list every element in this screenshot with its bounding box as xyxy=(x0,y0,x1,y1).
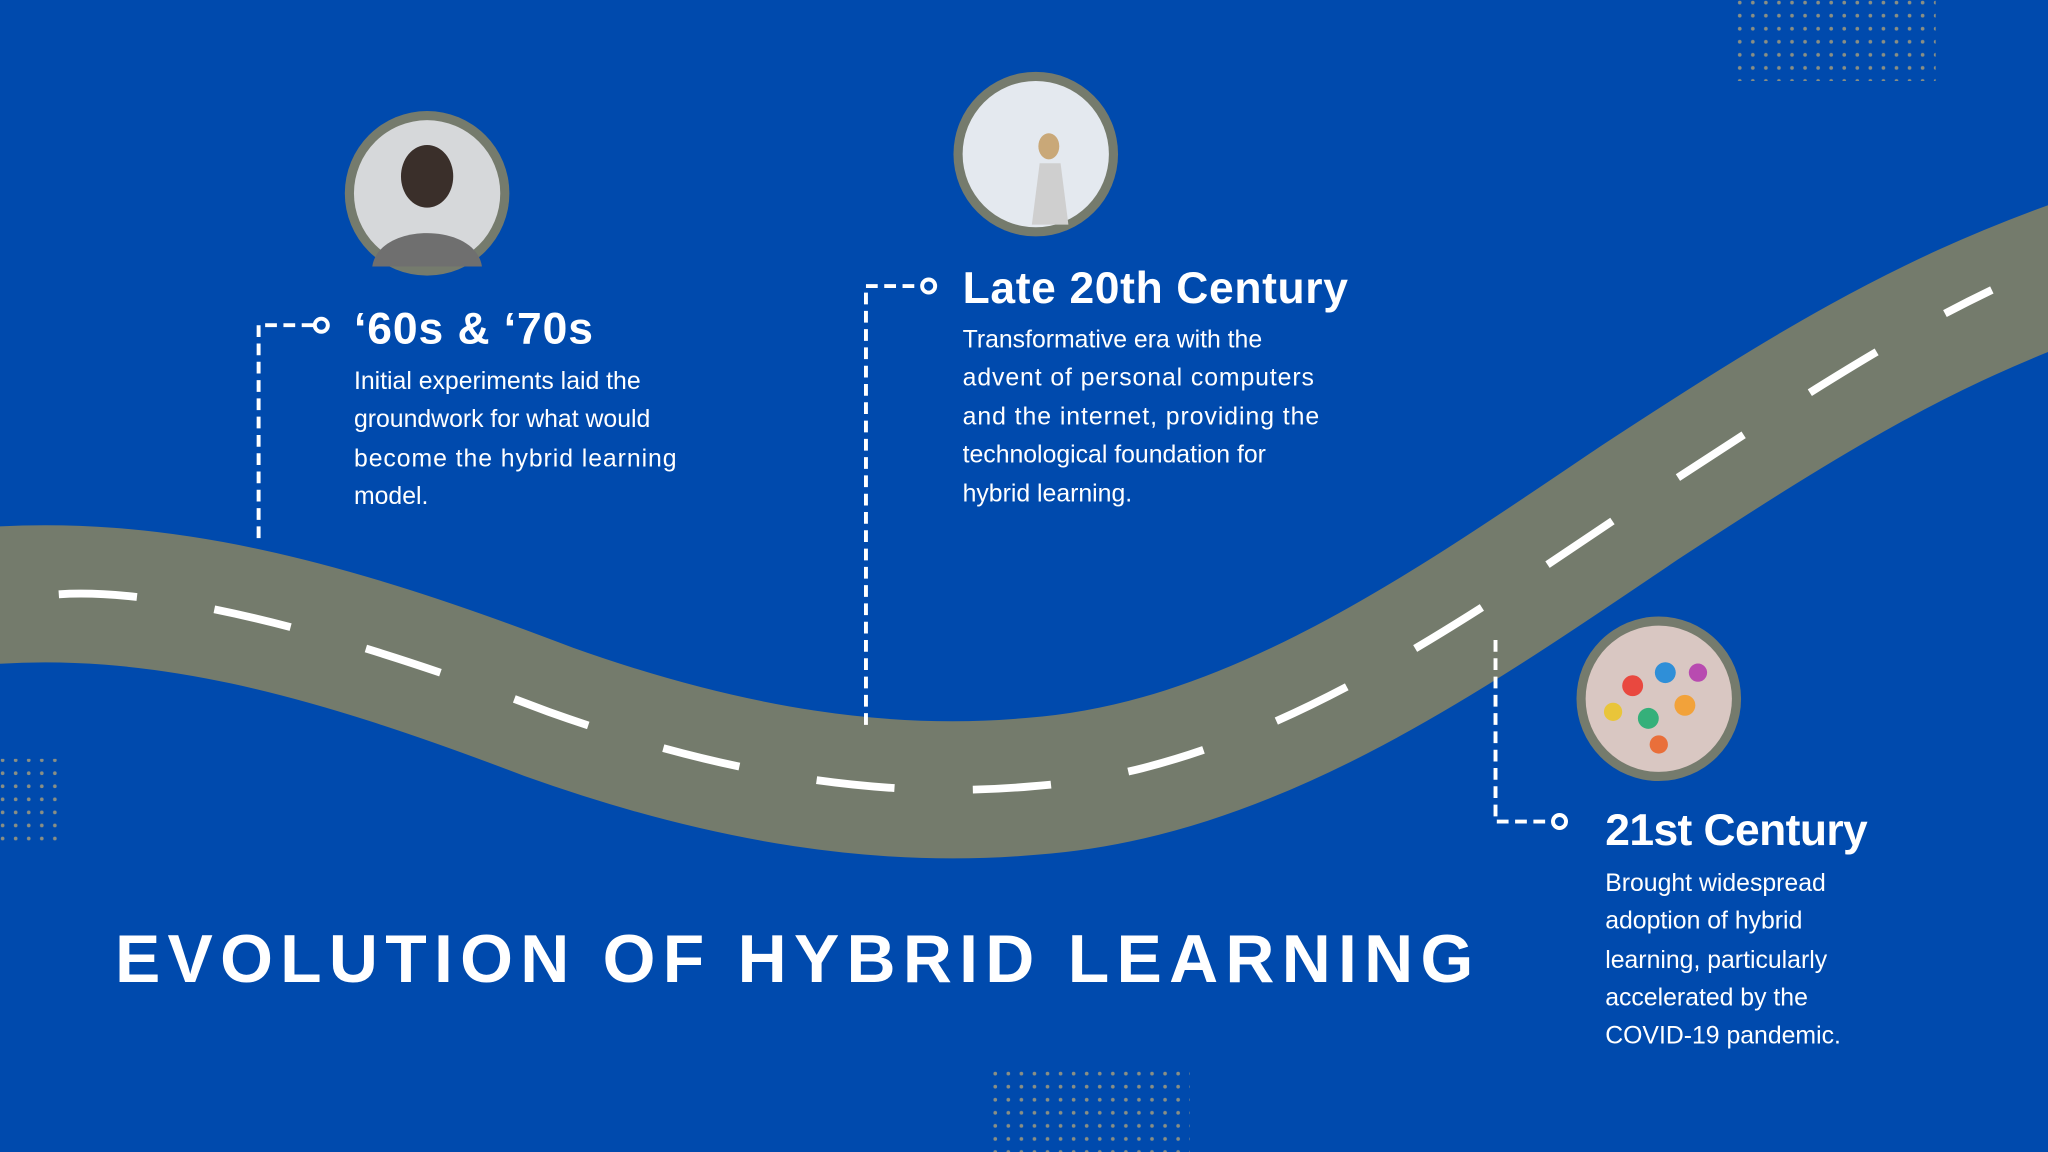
connector 3 xyxy=(1496,640,1566,828)
text 3: accelerated by the xyxy=(1605,985,1808,1012)
photo 3 xyxy=(1576,616,1741,781)
road xyxy=(0,268,2048,790)
text 3: adoption of hybrid xyxy=(1605,908,1802,935)
photo 2 xyxy=(953,72,1118,236)
photo 1 xyxy=(345,111,509,276)
text 3: learning, particularly xyxy=(1605,947,1828,974)
connector 2 xyxy=(866,280,935,725)
text 2 xyxy=(963,326,1319,508)
dot grid left xyxy=(0,759,65,842)
dot grid top right xyxy=(1732,0,1936,81)
text 2: and the internet, providing the xyxy=(963,403,1319,430)
title: EVOLUTION OF HYBRID LEARNING xyxy=(115,922,1473,997)
text 2: Transformative era with the xyxy=(963,326,1262,353)
text 2: hybrid learning. xyxy=(963,481,1132,508)
text 2: advent of personal computers xyxy=(963,364,1314,391)
heading 1: ‘60s & ‘70s xyxy=(354,305,593,354)
connector 1 xyxy=(259,319,328,538)
text 3: Brought widespread xyxy=(1605,870,1826,897)
text 2: technological foundation for xyxy=(963,441,1266,468)
heading 3: 21st Century xyxy=(1605,806,1868,855)
text 1: model. xyxy=(354,483,428,510)
text 3: COVID-19 pandemic. xyxy=(1605,1023,1841,1050)
text 1: Initial experiments laid the xyxy=(354,368,641,395)
text 1 xyxy=(354,368,677,510)
dot grid bottom xyxy=(986,1071,1190,1152)
text 3 xyxy=(1605,870,1841,1050)
text 1: become the hybrid learning xyxy=(354,445,677,472)
heading 2: Late 20th Century xyxy=(963,264,1348,313)
text 1: groundwork for what would xyxy=(354,406,650,433)
